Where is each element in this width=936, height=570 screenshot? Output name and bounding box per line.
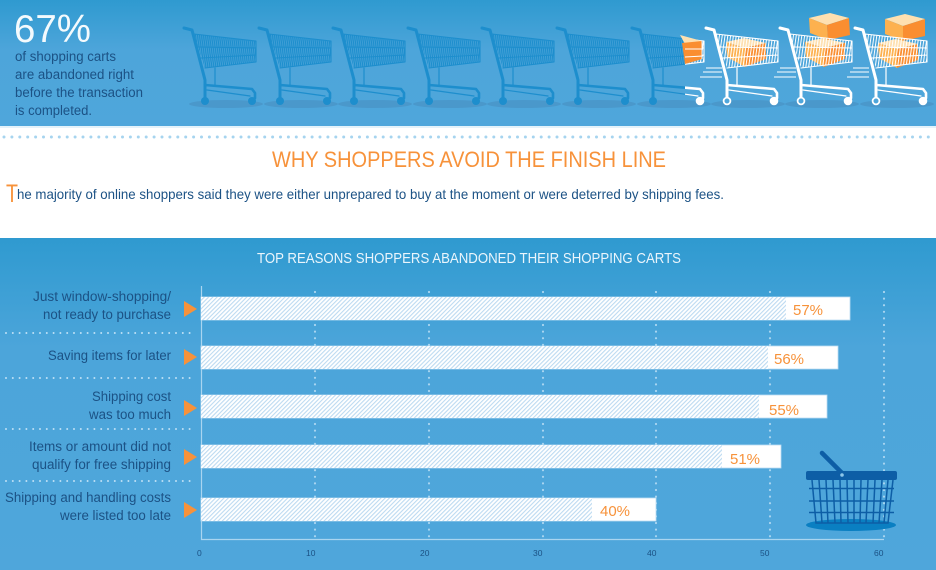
row: free shipping 51%: qualify for free shipping — [32, 457, 171, 472]
row: shipping cost 55%: Shipping cost — [92, 389, 171, 404]
heading: why shoppers avoid the finish line: WHY SHOPPERS AVOID THE FINISH LINE — [272, 147, 666, 172]
chart title: TOP REASONS SHOPPERS ABANDONED THEIR SHOPPING CARTS — [257, 251, 681, 267]
statistic: 67 percent: 67% — [14, 8, 91, 51]
axis tick labels: 10 — [306, 548, 316, 558]
text block: statistic description: are abandoned right — [15, 67, 134, 82]
axis tick labels: 20 — [420, 548, 430, 558]
row: saving items 56%: 56% — [774, 351, 804, 368]
icon: row of abandoned blue shopping carts — [184, 28, 636, 108]
icon: cart transitioning from blue to white — [632, 28, 711, 108]
text block: introduction with drop cap: T — [6, 180, 18, 208]
axis tick labels: 40 — [647, 548, 657, 558]
text block: statistic description: before the transaction — [15, 85, 143, 100]
row: listed too late 40%: Shipping and handling costs — [5, 490, 171, 505]
axis tick labels: 60 — [874, 548, 884, 558]
text block: statistic description — [15, 49, 143, 118]
row: shipping cost 55%: 55% — [769, 402, 799, 419]
row: free shipping 51%: Items or amount did not — [29, 439, 171, 454]
icon: shopping basket — [806, 453, 897, 531]
icon: white cart with box — [700, 28, 785, 108]
row: shipping cost 55%: was too much — [88, 407, 171, 422]
axis tick labels — [197, 548, 884, 558]
row: window-shopping 57%: 57% — [793, 302, 823, 319]
panel: top reasons chart background — [0, 238, 936, 570]
text block: statistic description: of shopping carts — [15, 49, 116, 64]
chart axes — [202, 286, 884, 540]
icon: second white cart with two boxes — [847, 14, 934, 108]
row: listed too late 40% — [5, 490, 656, 523]
icon: white cart with two boxes — [774, 13, 859, 108]
row: saving items 56% — [48, 346, 838, 369]
axis tick labels: 50 — [760, 548, 770, 558]
row: listed too late 40%: 40% — [600, 503, 630, 520]
text block: introduction with drop cap — [6, 180, 724, 208]
row: window-shopping 57% — [33, 289, 850, 322]
row: saving items 56%: Saving items for later — [48, 348, 171, 363]
row: listed too late 40%: were listed too late — [59, 508, 171, 523]
axis tick labels: 0 — [197, 548, 202, 558]
axis tick labels: 30 — [533, 548, 543, 558]
row: window-shopping 57%: not ready to purchase — [43, 307, 171, 322]
panel: header banner — [0, 0, 936, 128]
row: free shipping 51%: 51% — [730, 451, 760, 468]
row: free shipping 51% — [29, 439, 781, 472]
row: shipping cost 55% — [88, 389, 827, 422]
text block: statistic description: is completed. — [15, 103, 92, 118]
text block: introduction with drop cap: he majority of online shoppers said they were either unprepared to buy at the moment or were deterred by shipping fees. — [17, 186, 724, 202]
row: window-shopping 57%: Just window-shopping/ — [33, 289, 171, 304]
